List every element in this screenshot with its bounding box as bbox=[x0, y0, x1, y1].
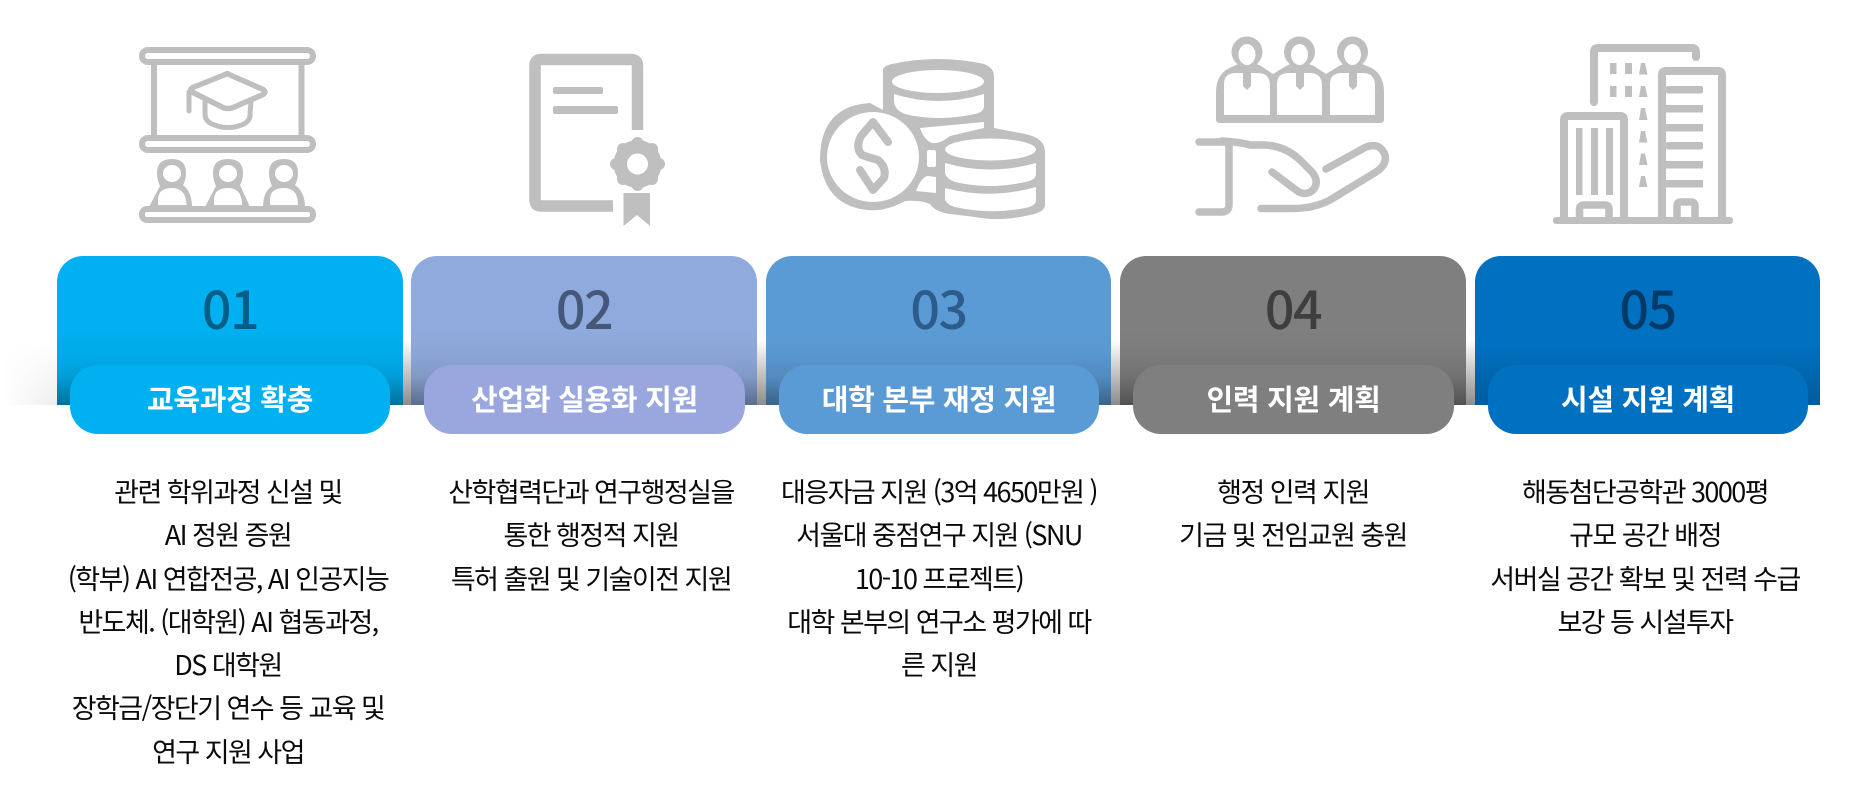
number 02: 02 bbox=[556, 269, 612, 344]
text block: 대학 본부 재정 지원 details bbox=[781, 471, 1097, 683]
text block: 시설 지원 계획 details: 서버실 공간 확보 및 전력 수급 bbox=[1490, 558, 1800, 597]
panel: card 03 bbox=[766, 256, 1111, 405]
icon: certificate bbox=[535, 60, 665, 226]
shadow band behind cards bbox=[0, 340, 1480, 405]
text block: 교육과정 확충 details: AI 정원 증원 bbox=[165, 514, 291, 553]
icon: graduation lecture bbox=[142, 50, 313, 220]
heading pill: 대학 본부 재정 지원 bbox=[779, 365, 1099, 434]
panel: card 05 bbox=[1475, 256, 1820, 405]
heading pill: 대학 본부 재정 지원: 대학 본부 재정 지원 bbox=[822, 377, 1056, 419]
heading pill: 인력 지원 계획: 인력 지원 계획 bbox=[1207, 377, 1380, 419]
number 05: 05 bbox=[1619, 269, 1676, 344]
number 01: 01 bbox=[202, 269, 258, 344]
text block: 인력 지원 계획 details: 행정 인력 지원 bbox=[1217, 471, 1369, 510]
text block: 산업화 실용화 지원 details: 특허 출원 및 기술이전 지원 bbox=[451, 558, 731, 597]
heading pill: 시설 지원 계획: 시설 지원 계획 bbox=[1561, 377, 1735, 419]
text block: 대학 본부 재정 지원 details: 른 지원 bbox=[901, 644, 977, 683]
text block: 산업화 실용화 지원 details bbox=[448, 471, 734, 597]
number 03: 03 bbox=[910, 269, 967, 344]
text block: 교육과정 확충 details: DS 대학원 bbox=[174, 644, 282, 683]
text block: 산업화 실용화 지원 details: 산학협력단과 연구행정실을 bbox=[448, 471, 734, 510]
heading pill: 인력 지원 계획 bbox=[1133, 365, 1454, 434]
text block: 대학 본부 재정 지원 details: 대응자금 지원 (3억 4650만원 ) bbox=[781, 471, 1097, 510]
heading pill: 시설 지원 계획 bbox=[1488, 365, 1808, 434]
number 04: 04 bbox=[1265, 269, 1321, 344]
text block: 교육과정 확충 details: 연구 지원 사업 bbox=[152, 731, 304, 770]
text block: 대학 본부 재정 지원 details: 10-10 프로젝트) bbox=[855, 558, 1023, 597]
text block: 인력 지원 계획 details bbox=[1179, 471, 1407, 553]
text block: 인력 지원 계획 details: 기금 및 전임교원 충원 bbox=[1179, 514, 1407, 553]
text block: 시설 지원 계획 details: 보강 등 시설투자 bbox=[1557, 601, 1733, 640]
text block: 산업화 실용화 지원 details: 통한 행정적 지원 bbox=[503, 514, 679, 553]
icon: coins bbox=[820, 59, 1045, 219]
icon: buildings bbox=[1553, 48, 1733, 224]
text block: 시설 지원 계획 details bbox=[1490, 471, 1800, 640]
text block: 시설 지원 계획 details: 해동첨단공학관 3000평 bbox=[1522, 471, 1768, 510]
heading pill: 산업화 실용화 지원 bbox=[424, 365, 745, 434]
icons row bbox=[139, 36, 1733, 226]
text block: 교육과정 확충 details: 관련 학위과정 신설 및 bbox=[114, 471, 342, 510]
panel: card 04 bbox=[1120, 256, 1466, 405]
panel: card 02 bbox=[411, 256, 757, 405]
text block: 시설 지원 계획 details: 규모 공간 배정 bbox=[1569, 514, 1721, 553]
text block: 교육과정 확충 details bbox=[68, 471, 388, 770]
heading pill: 교육과정 확충 bbox=[70, 365, 390, 434]
panel: card 01 bbox=[57, 256, 403, 405]
text block: 교육과정 확충 details: 장학금/장단기 연수 등 교육 및 bbox=[72, 687, 384, 726]
text block: 대학 본부 재정 지원 details: 대학 본부의 연구소 평가에 따 bbox=[787, 601, 1091, 640]
heading pill: 산업화 실용화 지원: 산업화 실용화 지원 bbox=[471, 377, 698, 419]
text block: 교육과정 확충 details: 반도체. (대학원) AI 협동과정, bbox=[78, 601, 378, 640]
heading pill: 교육과정 확충: 교육과정 확충 bbox=[147, 377, 313, 419]
text block: 대학 본부 재정 지원 details: 서울대 중점연구 지원 (SNU bbox=[796, 514, 1082, 553]
icon: people and hand bbox=[1199, 36, 1385, 212]
text block: 교육과정 확충 details: (학부) AI 연합전공, AI 인공지능 bbox=[68, 558, 388, 597]
